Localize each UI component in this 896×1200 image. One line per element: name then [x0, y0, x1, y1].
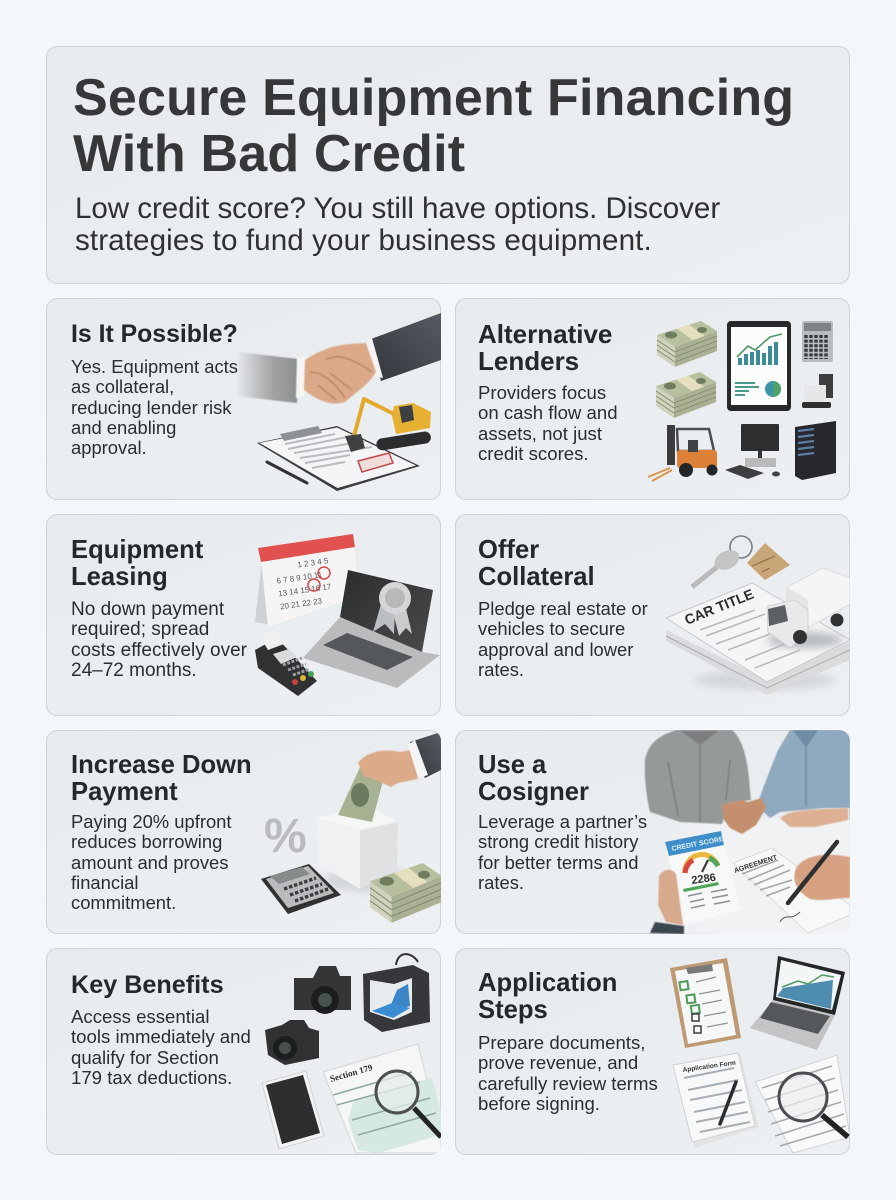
heading: Steps — [478, 996, 548, 1024]
heading: Is It Possible? — [71, 321, 238, 348]
forklift — [648, 425, 718, 481]
body text — [71, 356, 238, 458]
laptop with ribbon rosette — [303, 570, 440, 688]
body text: Yes. Equipment acts — [71, 356, 238, 377]
heading: Leasing — [71, 563, 168, 591]
panel: Increase Down Payment — [46, 730, 441, 934]
heading: Collateral — [478, 563, 595, 591]
heading: Application — [478, 969, 617, 997]
illustration: checklist, laptop, forms and magnifier — [670, 956, 850, 1154]
heading: Payment — [71, 778, 178, 806]
car title papers: CAR TITLE — [682, 586, 756, 628]
illustration: keys, car title papers and truck — [665, 535, 850, 695]
illustration: handshake, excavator and contract — [240, 313, 441, 491]
illustration: people shaking hands, credit score and agreement — [644, 730, 850, 934]
panel: Alternative Lenders — [455, 298, 850, 500]
tablet with charts — [727, 321, 791, 411]
wall calendar — [255, 534, 358, 627]
heading — [478, 969, 617, 1024]
right sleeve — [363, 313, 441, 381]
checklist clipboard — [670, 958, 741, 1048]
cash stacks — [656, 321, 717, 418]
large camera — [294, 966, 351, 1014]
body text: as collateral, — [71, 376, 174, 397]
panel: Application Steps — [455, 948, 850, 1155]
clasped hands — [304, 343, 376, 404]
car title papers — [666, 583, 850, 695]
body text: for better terms and — [478, 852, 638, 873]
heading — [478, 536, 595, 591]
heading: Lenders — [478, 346, 579, 376]
title: Secure Equipment Financing — [73, 69, 794, 127]
magnifying glass — [376, 1071, 441, 1137]
credit score report: CREDIT SCORE — [671, 836, 725, 853]
heading — [71, 536, 203, 591]
man in gray shirt — [645, 730, 751, 824]
wall calendar: 20 21 22 23 — [280, 596, 323, 611]
laptop with chart — [750, 956, 845, 1050]
subtitle: strategies to fund your business equipment. — [75, 224, 652, 257]
subtitle — [75, 192, 720, 257]
body text: rates. — [478, 872, 524, 893]
body text: Prepare documents, — [478, 1032, 645, 1053]
left sleeve fading — [236, 352, 307, 403]
panel: Key Benefits — [46, 948, 441, 1155]
dollar bill — [338, 765, 383, 822]
body text: before signing. — [478, 1093, 600, 1114]
white tablet — [262, 1071, 324, 1149]
agreement document: AGREEMENT — [733, 854, 779, 875]
application form papers with pen: Application Form — [682, 1060, 736, 1074]
illustration: cameras, 3D printer, tablet and tax form — [262, 953, 441, 1154]
body text — [478, 811, 647, 893]
desktop computer — [725, 424, 780, 479]
body text — [478, 598, 648, 680]
body text: vehicles to secure — [478, 618, 625, 639]
body text: required; spread — [71, 619, 209, 640]
magnifying glass — [779, 1073, 848, 1137]
body text: qualify for Section — [71, 1047, 219, 1068]
title: With Bad Credit — [73, 125, 465, 183]
body text: and enabling — [71, 417, 176, 438]
body text: reducing lender risk — [71, 397, 232, 418]
calculator — [802, 321, 833, 362]
panel: Is It Possible? — [46, 298, 441, 500]
body text — [71, 1006, 251, 1088]
cash stack — [370, 863, 442, 923]
body text: tools immediately and — [71, 1026, 251, 1047]
body text: financial — [71, 872, 138, 893]
body text: approval and lower — [478, 639, 633, 660]
excavator — [345, 399, 432, 452]
table surface — [650, 816, 850, 934]
subtitle: Low credit score? You still have options. Discover — [75, 192, 720, 224]
illustration: hand dropping cash into box — [261, 733, 441, 923]
body text: credit scores. — [478, 443, 589, 464]
panel: title header — [46, 46, 850, 284]
handshake and resting hand — [722, 798, 848, 834]
box truck — [767, 568, 850, 648]
body text: Access essential — [71, 1006, 209, 1027]
Section 179 tax form: Section 179 — [329, 1062, 374, 1084]
hand — [358, 749, 418, 787]
hand holding report — [650, 870, 684, 934]
credit score report: 2286 — [691, 872, 717, 887]
small camera — [265, 1020, 319, 1065]
body text: reduces borrowing — [71, 831, 222, 852]
wall calendar: 6 7 8 9 10 11 — [276, 570, 323, 586]
heading — [478, 319, 612, 376]
panel: Use a Cosigner — [455, 730, 850, 934]
body text: prove revenue, and — [478, 1052, 638, 1073]
clipboard contract — [257, 426, 420, 491]
heading — [478, 751, 589, 806]
heading: Alternative — [478, 319, 612, 349]
hand with pen — [788, 842, 850, 903]
percent sign: % — [264, 810, 307, 863]
wall calendar: 1 2 3 4 5 — [297, 556, 329, 569]
agreement document — [733, 848, 850, 933]
body text: 179 tax deductions. — [71, 1067, 232, 1088]
printer device — [802, 374, 833, 408]
wall calendar: 13 14 15 16 17 — [278, 582, 332, 598]
heading: Equipment — [71, 536, 203, 564]
body text: approval. — [71, 437, 147, 458]
heading — [71, 751, 252, 806]
illustration: cash, tablet, forklift and computers — [648, 321, 836, 482]
panel: Equipment Leasing — [46, 514, 441, 716]
heading: Key Benefits — [71, 971, 224, 999]
body text: costs effectively over — [71, 640, 247, 661]
body text: commitment. — [71, 892, 176, 913]
heading: Cosigner — [478, 778, 589, 806]
white box with slot — [317, 806, 415, 892]
body text: 24–72 months. — [71, 660, 197, 681]
application form papers with pen — [673, 1053, 759, 1148]
heading: Increase Down — [71, 751, 252, 779]
body text: Providers focus — [478, 382, 606, 403]
dark sleeve with cuff — [408, 732, 441, 778]
body text: amount and proves — [71, 852, 228, 873]
body text — [478, 1032, 658, 1114]
woman in blue shirt — [757, 730, 850, 818]
3D printer — [363, 954, 430, 1032]
server tower — [795, 421, 836, 480]
body text: assets, not just — [478, 423, 602, 444]
body text: on cash flow and — [478, 402, 618, 423]
Section 179 tax form — [323, 1044, 441, 1153]
house key and tag — [692, 536, 790, 587]
body text: Pledge real estate or — [478, 598, 648, 619]
body text — [71, 599, 247, 681]
card terminal — [255, 630, 317, 696]
panel: Offer Collateral — [455, 514, 850, 716]
body text: strong credit history — [478, 831, 638, 852]
body text — [478, 382, 618, 464]
body text — [71, 811, 232, 913]
body text: No down payment — [71, 599, 224, 620]
calculator — [261, 864, 341, 914]
body text: rates. — [478, 659, 524, 680]
reviewed document — [755, 1055, 850, 1153]
title — [73, 69, 794, 183]
body text: Leverage a partner’s — [478, 811, 647, 832]
heading: Offer — [478, 536, 539, 564]
illustration: calendar, laptop and card terminal — [255, 534, 440, 696]
body text: Paying 20% upfront — [71, 811, 232, 832]
credit score report — [665, 831, 741, 925]
heading: Use a — [478, 751, 546, 779]
body text: carefully review terms — [478, 1073, 658, 1094]
